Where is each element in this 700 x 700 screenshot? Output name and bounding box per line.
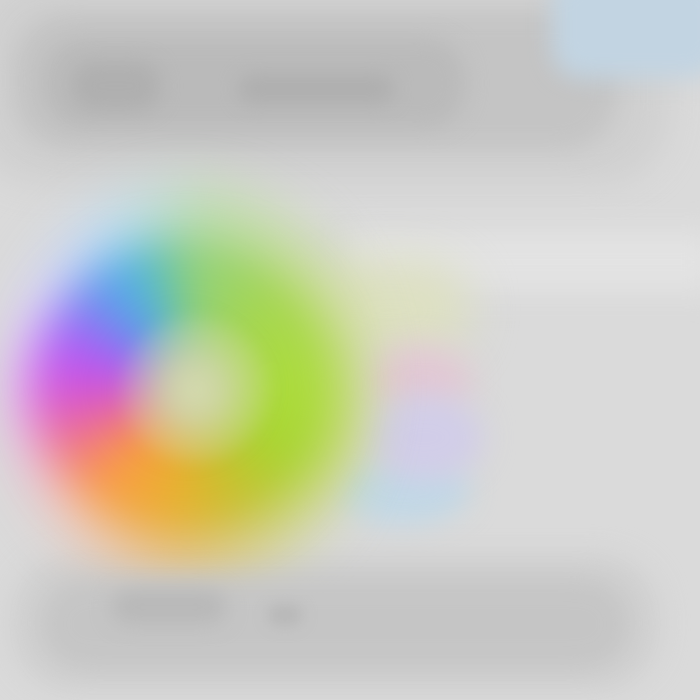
footer halo [10,555,660,690]
panel: top right corner accent [552,0,700,78]
panel: side tint near wheel [310,260,470,360]
background band behind the header [0,0,670,185]
donut chart wheel [32,238,337,536]
heading word left [72,62,160,110]
header panel [12,12,618,150]
footer panel [40,578,630,670]
soft circle: lavender middle [365,395,483,480]
heading word right [238,74,394,104]
footer text right [268,604,302,626]
heading block [42,38,466,128]
wheel halo [5,185,370,585]
soft circle: pink top [362,345,472,415]
footer text left [112,590,226,624]
lighter strip right of the wheel [350,232,700,292]
soft circle: blue bottom [335,455,470,525]
donut centre [115,315,275,465]
